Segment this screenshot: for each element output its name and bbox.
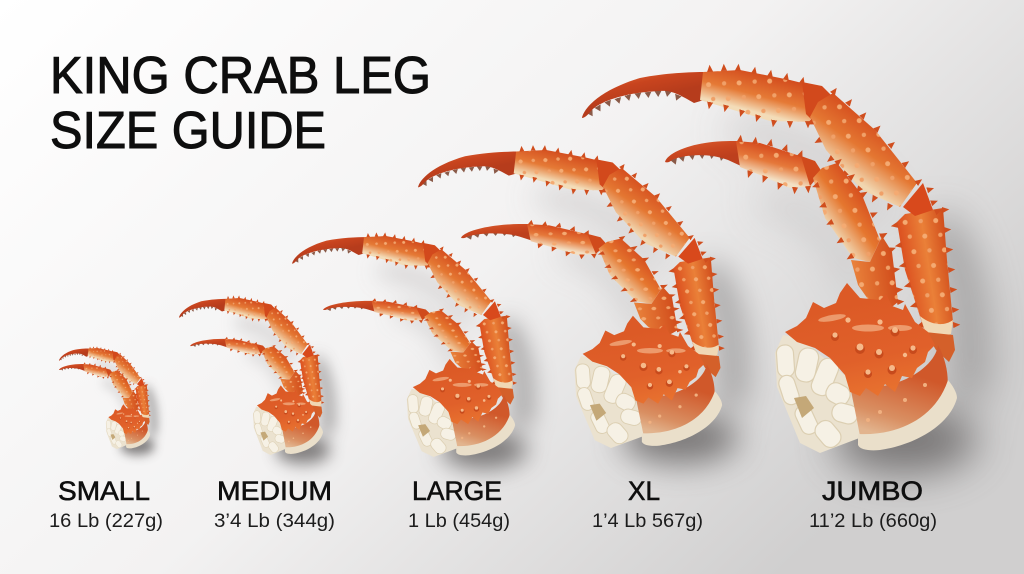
crab shadows xyxy=(95,130,977,474)
label: jumbo: 11’2 Lb (660g) xyxy=(809,511,937,532)
label: small: 16 Lb (227g) xyxy=(49,511,163,532)
title xyxy=(50,47,431,160)
label: medium xyxy=(214,476,335,532)
crab: large xyxy=(292,236,515,457)
crab: jumbo xyxy=(582,70,957,453)
crab: medium xyxy=(179,298,323,455)
label: jumbo: JUMBO xyxy=(822,476,923,506)
label: XL: 1’4 Lb 567g) xyxy=(592,511,703,532)
label: small: SMALL xyxy=(58,476,150,506)
crab: XL xyxy=(418,150,722,448)
label: medium: MEDIUM xyxy=(217,476,332,506)
label: small xyxy=(49,476,163,532)
label: large: 1 Lb (454g) xyxy=(408,511,510,532)
crab: small xyxy=(59,348,150,449)
label: XL xyxy=(592,476,703,532)
title: KING CRAB LEG xyxy=(50,47,431,105)
label: large xyxy=(408,476,510,532)
title: SIZE GUIDE xyxy=(50,102,326,160)
label: jumbo xyxy=(809,476,937,532)
label: large: LARGE xyxy=(412,476,502,506)
label: medium: 3’4 Lb (344g) xyxy=(214,511,335,532)
label: XL: XL xyxy=(628,476,660,506)
